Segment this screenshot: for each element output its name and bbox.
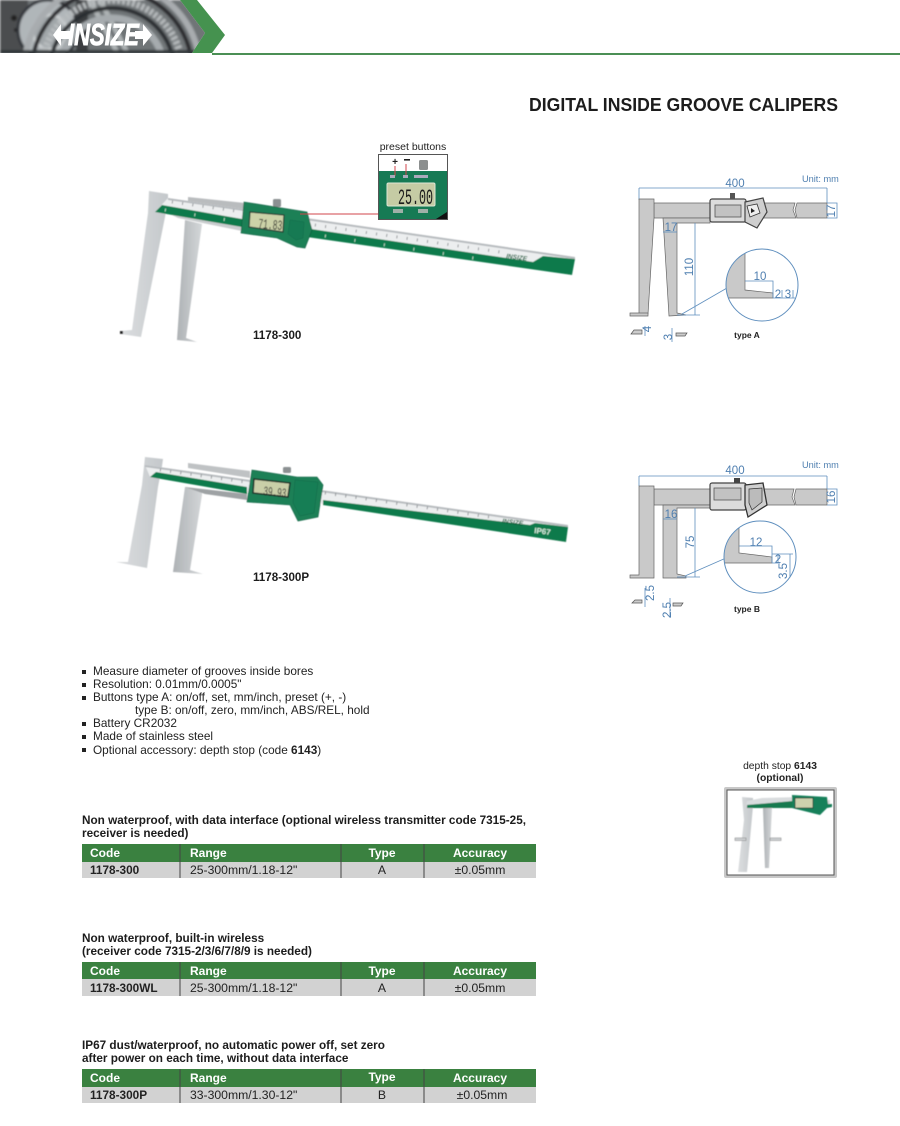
green chevron <box>180 0 225 53</box>
unit label: Unit: mm <box>802 174 839 184</box>
height 75: 75 <box>685 536 697 548</box>
sliding jaw <box>173 487 203 574</box>
LCD reading: 39.93 <box>263 484 287 501</box>
feature list: Battery CR2032 <box>93 716 177 730</box>
detail circle: 3.5 <box>778 563 790 579</box>
upper slider edge <box>188 197 245 210</box>
fixed jaw <box>120 191 168 337</box>
title: DIGITAL INSIDE GROOVE CALIPERS <box>529 95 838 115</box>
feature list: Buttons type A: on/off, set, mm/inch, preset (+, -) <box>93 690 346 704</box>
table section 1: 25-300mm/1.18-12" <box>190 863 297 877</box>
overall length: 400 <box>725 465 745 477</box>
table section 2: Accuracy <box>453 964 507 978</box>
table heading: IP67 dust/waterproof, no automatic power off, set zero <box>82 1039 385 1052</box>
detail circle <box>726 248 798 322</box>
detail leader <box>682 288 727 314</box>
technical drawing: type B: 2.5 <box>662 602 674 618</box>
table section 3: B <box>378 1088 386 1102</box>
table section 3: after power on each time, without data interface <box>82 1052 349 1065</box>
table section 2: Range <box>190 964 227 978</box>
detail circle: 2 <box>775 554 781 566</box>
table section 2: 25-300mm/1.18-12" <box>190 981 297 995</box>
technical drawing: type A: 3 <box>663 334 675 340</box>
minus marker <box>404 159 410 161</box>
caliper photo: 1178-300P <box>116 457 568 574</box>
feature list: type B: on/off, zero, mm/inch, ABS/REL, hold <box>135 703 370 717</box>
inset reading: 25.00 <box>398 186 433 211</box>
table section 1: receiver is needed) <box>82 827 189 840</box>
table data row <box>82 1087 536 1103</box>
table section 2: Code <box>90 964 120 978</box>
detail circle <box>724 520 796 594</box>
table section 1: 1178-300 <box>90 863 140 877</box>
ruler ticks <box>172 202 243 212</box>
technical drawing: type B: 2.5 <box>645 585 657 601</box>
LCD <box>249 212 284 232</box>
technical drawing: type A <box>630 174 839 342</box>
table section 1: Range <box>190 846 227 860</box>
table section 2: ±0.05mm <box>455 981 505 995</box>
unit label: Unit: mm <box>802 460 839 470</box>
green band <box>155 205 242 227</box>
thumb knob <box>273 199 281 207</box>
green band <box>150 472 247 494</box>
detail circle: 3 <box>785 289 791 301</box>
table section 1 <box>82 814 536 878</box>
table header row <box>82 962 536 979</box>
table section 2 <box>82 932 536 996</box>
drawn display <box>710 483 746 510</box>
feature list: Optional accessory: depth stop (code 6143) <box>93 743 321 757</box>
beam scale <box>155 198 575 275</box>
under strip <box>170 214 242 231</box>
type label: type B <box>734 604 760 614</box>
logo: INSIZE <box>68 17 140 52</box>
tip sections <box>631 330 642 334</box>
table section 3: Type <box>368 1070 396 1084</box>
plus marker: + <box>392 157 398 168</box>
fixed jaw <box>639 199 654 314</box>
feature list <box>82 664 370 757</box>
header machinery photo <box>0 0 205 53</box>
inset: preset buttons <box>378 141 448 220</box>
header rule <box>212 53 900 55</box>
sliding jaw <box>663 218 710 316</box>
table section 3: Accuracy <box>453 1071 507 1085</box>
detail circle: 12 <box>750 537 762 549</box>
beam outline <box>654 203 796 218</box>
red leader line <box>300 213 378 215</box>
feature list: Made of stainless steel <box>93 729 213 743</box>
inset caption: preset buttons <box>380 141 446 153</box>
table section 3: Code <box>90 1071 120 1085</box>
digital display body <box>241 202 312 248</box>
accessory frame <box>724 787 837 878</box>
table section 2: 1178-300WL <box>90 981 158 995</box>
table section 2: (receiver code 7315-2/3/6/7/8/9 is needed) <box>82 945 312 958</box>
fixed jaw <box>630 486 654 578</box>
overall length: 400 <box>725 178 745 190</box>
LCD <box>253 479 290 497</box>
table section 1: Accuracy <box>453 846 507 860</box>
thumb knob <box>283 467 291 473</box>
drawn display <box>710 199 746 222</box>
technical drawing: type B <box>630 460 839 618</box>
feature list: Measure diameter of grooves inside bores <box>93 664 313 678</box>
table heading: Non waterproof, built-in wireless <box>82 932 265 945</box>
product code label: 1178-300 <box>253 329 301 342</box>
product code label: 1178-300P <box>253 571 309 584</box>
IP67 mark: IP67 <box>534 526 552 537</box>
detail circle: 10 <box>754 271 766 283</box>
LCD reading: 71.83 <box>258 217 283 235</box>
beam height 16: 16 <box>826 491 838 503</box>
upper slider <box>188 463 250 478</box>
digital display body <box>247 470 323 521</box>
inset body <box>379 171 447 219</box>
header banner <box>0 0 900 55</box>
table section 3: 1178-300P <box>90 1088 147 1102</box>
table data row <box>82 979 536 996</box>
table header row <box>82 844 536 862</box>
table section 1: A <box>378 863 387 877</box>
beam outline <box>654 489 795 505</box>
inset knob <box>419 160 428 170</box>
detail leader <box>685 558 726 576</box>
depth stop accessory <box>724 761 837 878</box>
beam height 17: 17 <box>826 205 838 217</box>
lower slider <box>185 487 247 500</box>
table data row <box>82 862 536 878</box>
sliding jaw <box>177 220 202 342</box>
table section 2: Type <box>368 964 396 978</box>
pointer icon <box>288 220 304 240</box>
depth stop accessory: (optional) <box>757 773 803 784</box>
type label: type A <box>734 330 760 340</box>
tip sections <box>632 600 642 603</box>
height 110: 110 <box>684 258 696 276</box>
table section 1: Type <box>368 846 396 860</box>
brand mark on beam: INSIZE <box>506 253 528 263</box>
table section 3 <box>82 1039 536 1103</box>
table section 2: A <box>378 981 387 995</box>
beam scale <box>145 465 568 542</box>
detail circle: 2 <box>775 289 781 301</box>
inset LCD <box>387 183 435 206</box>
ruler ticks <box>160 470 245 482</box>
brand mark on beam: INSIZE <box>502 518 524 528</box>
table section 3: ±0.05mm <box>457 1088 507 1102</box>
table section 1: ±0.05mm <box>455 863 505 877</box>
technical drawing: type A: 4 <box>642 325 654 332</box>
sliding jaw <box>663 505 711 578</box>
accessory photo <box>735 795 832 872</box>
table section 3: Range <box>190 1071 227 1085</box>
fixed jaw <box>116 457 163 568</box>
table header row <box>82 1069 536 1087</box>
table section 3: 33-300mm/1.30-12" <box>190 1088 297 1102</box>
jaw width 17: 17 <box>665 222 677 234</box>
table heading: Non waterproof, with data interface (optional wireless transmitter code 7315-25, <box>82 814 526 827</box>
front shield <box>293 480 318 516</box>
jaw width 16: 16 <box>665 509 677 521</box>
feature list: Resolution: 0.01mm/0.0005" <box>93 677 241 691</box>
accessory caption: depth stop 6143 <box>743 761 817 772</box>
table section 1: Code <box>90 846 120 860</box>
caliper photo: 1178-300 <box>120 191 575 342</box>
